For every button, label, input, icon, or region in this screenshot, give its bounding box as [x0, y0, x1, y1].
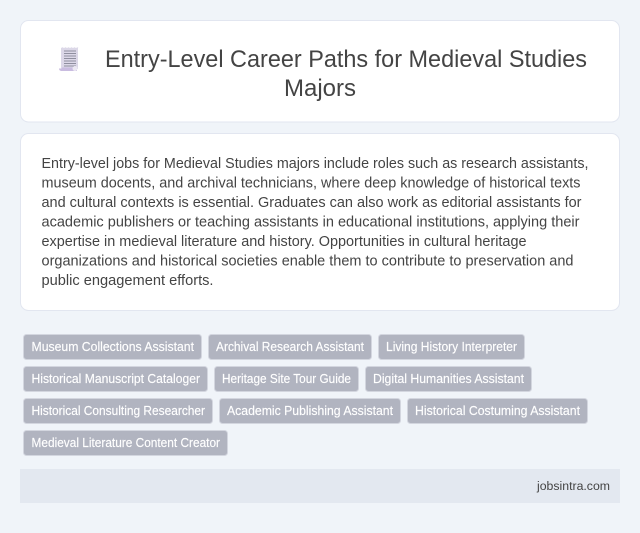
description panel [20, 134, 620, 310]
footer source text: jobsintra.com [536, 479, 610, 493]
tag list [24, 334, 588, 456]
tag: Medieval Literature Content Creator [32, 436, 220, 450]
title [105, 46, 587, 102]
description text [42, 156, 588, 289]
description text: Entry-level jobs for Medieval Studies majors include roles such as research assistants, [42, 156, 588, 172]
tag: Academic Publishing Assistant [227, 404, 393, 418]
icon: manuscript scroll [59, 47, 78, 71]
tag [24, 398, 212, 424]
description text: expertise in medieval literature and history. Opportunities in cultural heritage [42, 234, 526, 250]
tag: Living History Interpreter [386, 340, 517, 354]
title: Entry-Level Career Paths for Medieval Studies [105, 46, 587, 73]
tag: Historical Consulting Researcher [32, 404, 205, 418]
tag [366, 366, 532, 392]
tag: Digital Humanities Assistant [373, 372, 524, 386]
tag: Heritage Site Tour Guide [222, 372, 351, 386]
title: Majors [284, 75, 356, 102]
description text: organizations and historical societies enable them to contribute to preservation and [42, 254, 574, 270]
description text: and cultural contexts is essential. Graduates can also work as editorial assistants for [42, 195, 582, 211]
description text: museum docents, and archival technicians, where deep knowledge of historical texts [42, 176, 580, 192]
tag [208, 334, 372, 360]
footer [20, 469, 620, 503]
tag [24, 430, 228, 456]
header panel [20, 20, 620, 122]
tag: Historical Costuming Assistant [415, 404, 580, 418]
description text: public engagement efforts. [42, 273, 214, 289]
tag: Historical Manuscript Cataloger [32, 372, 200, 386]
tag [214, 366, 358, 392]
tag: Museum Collections Assistant [32, 340, 194, 354]
tag [220, 398, 400, 424]
tag [408, 398, 588, 424]
description text: academic publishers or teaching assistants in educational institutions, applying their [42, 214, 580, 230]
tag [24, 366, 208, 392]
tag [24, 334, 202, 360]
tag: Archival Research Assistant [216, 340, 364, 354]
tag [378, 334, 524, 360]
